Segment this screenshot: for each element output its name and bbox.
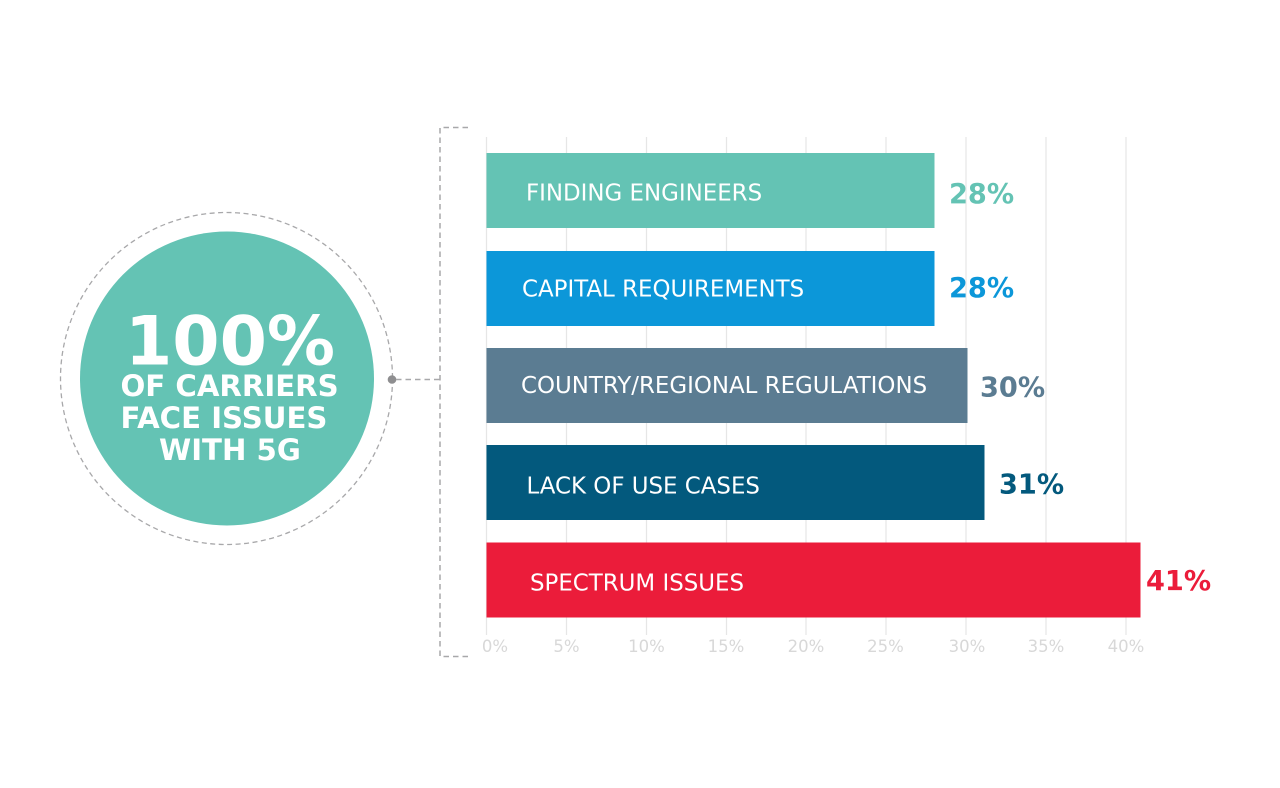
bar: capital requirements 28%: CAPITAL REQUIREMENTS bbox=[522, 276, 804, 302]
bar: lack of use cases 31%: LACK OF USE CASES bbox=[526, 474, 760, 500]
circle caption bbox=[120, 369, 339, 467]
teal disc bbox=[80, 232, 374, 526]
bar: country/regional regulations 30%: COUNTRY/REGIONAL REGULATIONS bbox=[521, 373, 927, 399]
bar chart bbox=[486, 153, 1211, 618]
x axis labels: 0% bbox=[482, 637, 508, 656]
bar: country/regional regulations 30%: 30% bbox=[980, 372, 1045, 404]
bar: capital requirements 28%: 28% bbox=[949, 273, 1014, 304]
x axis labels: 15% bbox=[708, 637, 744, 656]
connector dot bbox=[388, 375, 396, 384]
headline: 100%: 100% bbox=[125, 302, 335, 382]
bar: spectrum issues 41% bbox=[486, 542, 1211, 618]
outer dashed ring bbox=[60, 212, 392, 544]
x axis labels: 25% bbox=[867, 637, 904, 656]
circle caption: WITH 5G bbox=[159, 433, 301, 467]
x axis labels bbox=[482, 637, 1144, 656]
bar: country/regional regulations 30% bbox=[486, 348, 1045, 423]
x axis labels: 20% bbox=[788, 637, 824, 656]
bar: capital requirements 28% bbox=[486, 251, 1014, 326]
x axis labels: 10% bbox=[628, 637, 665, 656]
x axis labels: 5% bbox=[553, 637, 580, 656]
bar: finding engineers 28%: FINDING ENGINEERS bbox=[526, 180, 762, 206]
connector bracket bbox=[388, 128, 468, 656]
bar: lack of use cases 31%: 31% bbox=[999, 470, 1064, 500]
bar: spectrum issues 41%: 41% bbox=[1146, 566, 1211, 597]
panel: 100% circle callout bbox=[60, 212, 392, 544]
x axis labels: 35% bbox=[1028, 637, 1064, 656]
bar: spectrum issues 41%: SPECTRUM ISSUES bbox=[530, 570, 744, 596]
circle caption: OF CARRIERS bbox=[120, 369, 339, 403]
x axis labels: 30% bbox=[949, 637, 985, 656]
bar: lack of use cases 31% bbox=[486, 445, 1064, 520]
circle caption: FACE ISSUES bbox=[120, 401, 327, 435]
bar: finding engineers 28%: 28% bbox=[949, 179, 1014, 210]
bar: finding engineers 28% bbox=[486, 153, 1014, 228]
grid lines bbox=[486, 137, 1126, 635]
x axis labels: 40% bbox=[1108, 637, 1144, 656]
